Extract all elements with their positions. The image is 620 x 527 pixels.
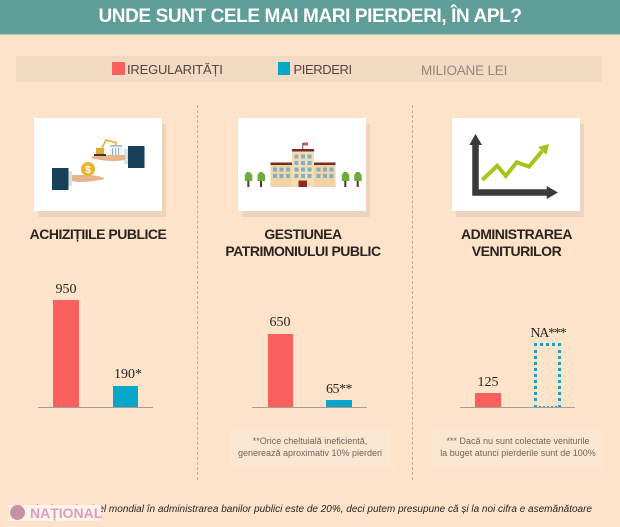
heading: ACHIZIȚIILE PUBLICE — [30, 226, 166, 242]
panel: gestiunea patrimoniului public — [225, 118, 381, 408]
heading: PATRIMONIULUI PUBLIC — [225, 242, 381, 258]
title: UNDE SUNT CELE MAI MARI PIERDERI, ÎN APL? — [98, 6, 522, 27]
bar: pierderi not available — [534, 343, 561, 408]
bar value: 950: 950 — [56, 282, 76, 297]
bar value: 190: 190* — [114, 367, 142, 382]
bar: iregularități 650 — [268, 334, 293, 408]
legend unit: MILIOANE LEI — [421, 63, 507, 78]
bar chart — [460, 326, 575, 408]
bar value: NA: NA*** — [530, 326, 566, 341]
heading: GESTIUNEA — [264, 226, 342, 242]
footnote: pierderi ineficiente: generează aproximativ 10% pierderi — [238, 448, 382, 458]
panel: administrarea veniturilor — [452, 118, 584, 408]
panel: achizițiile publice — [30, 118, 166, 408]
logo mark — [10, 505, 25, 520]
bar chart — [38, 282, 153, 408]
heading: ADMINISTRAREA — [461, 226, 572, 242]
bar chart — [252, 315, 367, 408]
bar: iregularități 125 — [475, 393, 501, 408]
bar: pierderi 190 — [112, 386, 138, 408]
bar value: 650: 650 — [270, 315, 290, 330]
heading — [461, 226, 572, 258]
bar: pierderi 65 — [326, 400, 352, 408]
legend swatch: pierderi — [278, 62, 290, 75]
legend label: iregularități: IREGULARITĂȚI — [127, 62, 223, 77]
title — [0, 0, 620, 35]
icon: public building with trees — [238, 118, 366, 211]
bar value: 125: 125 — [478, 375, 498, 390]
icon: hands exchanging money for construction — [34, 118, 162, 211]
legend swatch: iregularități — [112, 62, 124, 75]
footnote: pierderi ineficiente — [230, 428, 390, 469]
icon: hands exchanging money for construction: $ — [85, 165, 91, 176]
legend — [16, 56, 602, 82]
bar: iregularități 950 — [53, 300, 78, 408]
icon: rising line chart — [452, 118, 580, 211]
footnote: venituri necolectate — [433, 428, 603, 469]
heading — [225, 226, 381, 258]
footnote: venituri necolectate: la buget atunci pierderile sunt de 100% — [440, 448, 596, 458]
logo: național — [9, 505, 101, 521]
logo wordmark: NAȚIONAL — [30, 505, 102, 521]
bar value: 65: 65** — [326, 382, 352, 397]
legend label: pierderi: PIERDERI — [294, 62, 352, 77]
footnote: venituri necolectate: *** Dacă nu sunt colectate veniturile — [446, 436, 590, 446]
footnote: pierderi ineficiente: **Orice cheltuială ineficientă, — [253, 436, 367, 446]
footnote: media mondială: *Pierderea la nivel mondial în administrarea banilor publici este de 20%, deci putem presupune că și la noi cifra e asemănătoare — [25, 504, 592, 515]
heading: VENITURILOR — [472, 242, 561, 258]
